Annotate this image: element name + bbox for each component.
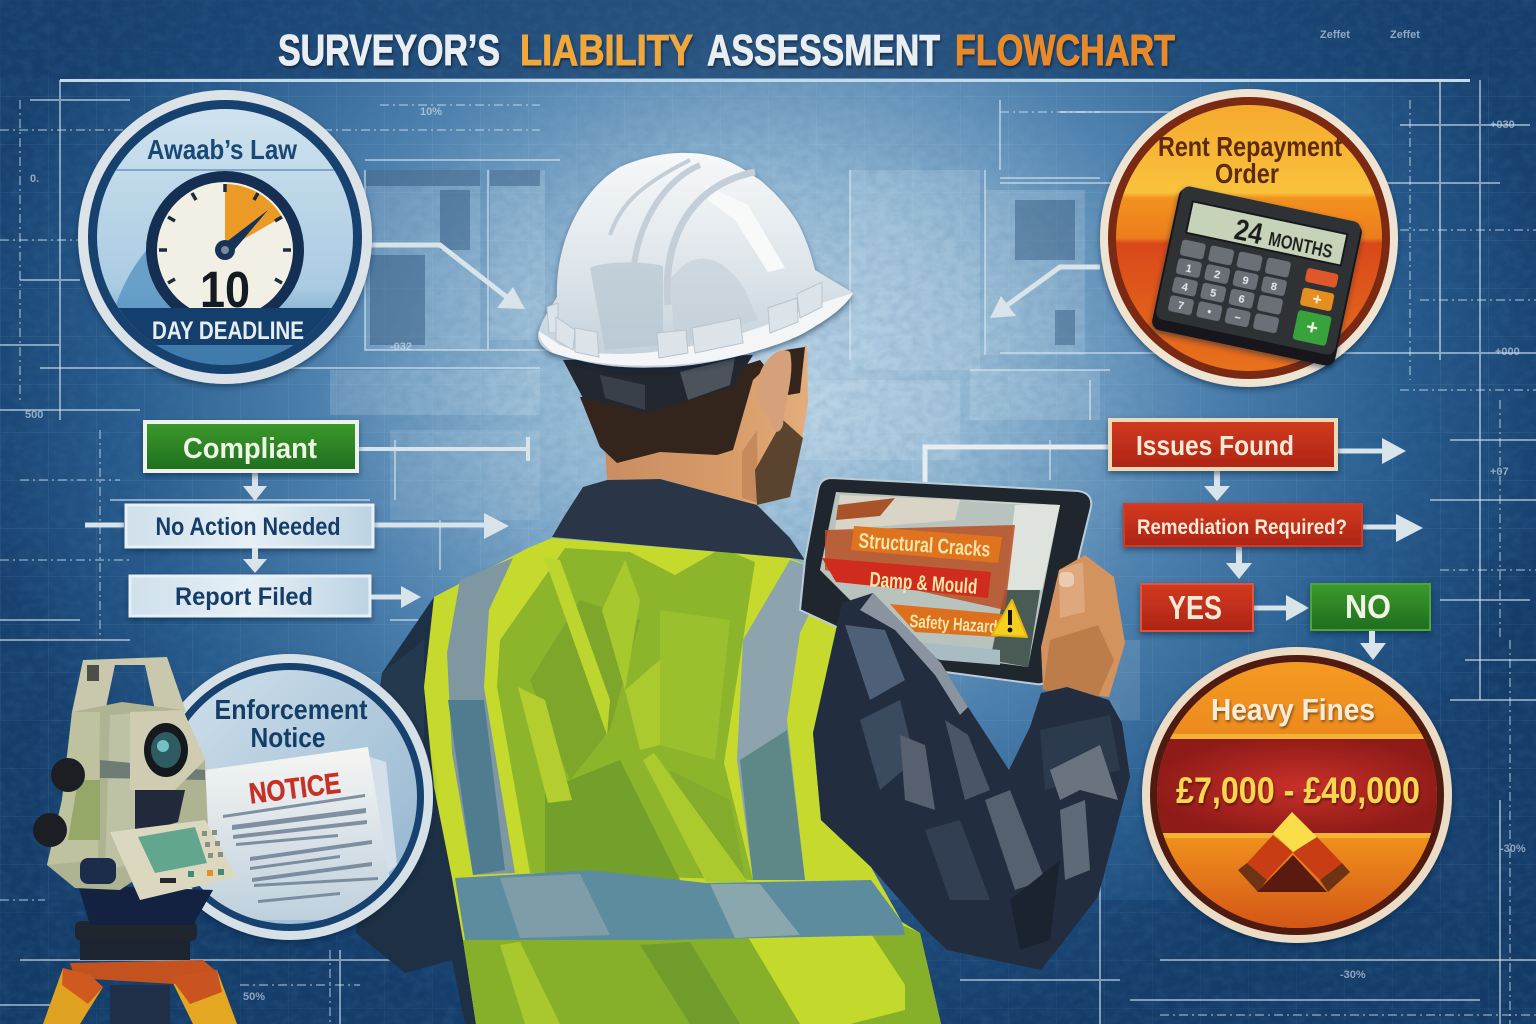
icon: calculator: MONTHS (1266, 229, 1334, 263)
title underline (60, 79, 1470, 82)
icon: notice document: NOTICE (247, 768, 343, 811)
tablet label: Structural Cracks: Structural Cracks (858, 529, 991, 562)
heading: Enforcement Notice (214, 694, 368, 753)
worker seen from behind (356, 153, 1130, 1024)
tablet (800, 478, 1091, 684)
icon: calculator: − (1233, 312, 1242, 325)
flow: compliant branch (85, 422, 528, 616)
heading: Rent Repayment Order (1158, 131, 1342, 189)
badge: Awaab's Law (78, 90, 372, 384)
title: ASSESSMENT (707, 26, 940, 75)
heading: Rent Repayment Order: Rent Repayment (1158, 131, 1342, 162)
tablet label: Safety Hazard (890, 604, 1002, 637)
icon: clock (146, 171, 304, 308)
blueprint background: Zeffet (1390, 29, 1420, 41)
blueprint background: 10% (420, 106, 442, 118)
reflective stripes (447, 558, 905, 940)
arrow: no action to report filed (243, 548, 267, 573)
title (278, 26, 1175, 75)
icon: calculator (1150, 185, 1364, 367)
helmet suspension band (563, 355, 753, 413)
tablet label: Structural Cracks (851, 526, 1002, 563)
icon: calculator: + (1311, 291, 1323, 309)
icon: surveying total station on tripod (33, 657, 237, 1024)
icon: calculator: 6 (1237, 293, 1246, 306)
box: No Action Needed: No Action Needed (156, 513, 340, 541)
connector: compliant to end stop (359, 437, 528, 461)
helmet (538, 153, 853, 368)
box: NO (1311, 584, 1430, 630)
instrument lens (144, 723, 188, 777)
icon: calculator: 9 (1241, 275, 1250, 288)
vest green centre (497, 548, 755, 880)
arrow: report filed to right (371, 586, 421, 608)
instrument body (47, 657, 208, 890)
icon: calculator: 4 (1180, 281, 1190, 294)
box: Remediation Required?: Remediation Required? (1137, 516, 1347, 539)
hair (580, 347, 805, 463)
high-visibility vest (424, 538, 941, 1024)
heading: Enforcement Notice: Enforcement (214, 694, 368, 725)
badge: Enforcement Notice (147, 654, 433, 940)
arrow: issues found to right (1338, 438, 1406, 464)
collar (552, 479, 805, 560)
banner text: Day Deadline: DAY DEADLINE (152, 317, 304, 345)
tablet label: Damp and Mould: Damp & Mould (869, 568, 978, 599)
icon: calculator: 24 (1232, 213, 1266, 251)
arrow: no action to right (85, 513, 509, 539)
heading: Rent Repayment Order: Order (1215, 158, 1279, 189)
arrow: issues found to remediation (1204, 471, 1230, 501)
box: Report Filed (130, 576, 370, 616)
icon: clock: 10 (200, 261, 250, 318)
icon: calculator: 2 (1213, 269, 1221, 282)
heading: Awaab's Law: Awaab’s Law (147, 134, 297, 165)
ear (757, 350, 791, 432)
instrument base (75, 885, 213, 960)
instrument control panel (110, 820, 237, 900)
icon: calculator: • (1206, 306, 1212, 319)
icon: warning triangle (992, 600, 1027, 637)
tripod (43, 960, 237, 1024)
box: No Action Needed (126, 505, 373, 547)
heading: Heavy Fines: Heavy Fines (1211, 692, 1375, 727)
box: YES (1141, 584, 1253, 631)
title: LIABILITY (520, 26, 693, 75)
tablet label: Damp and Mould (822, 558, 991, 599)
box: Report Filed: Report Filed (175, 583, 313, 611)
icon: calculator: 8 (1270, 281, 1278, 294)
box: Remediation Required? (1124, 504, 1362, 546)
instrument knobs (33, 758, 116, 884)
blueprint background: Zeffet (1320, 29, 1350, 41)
blueprint background: 50% (243, 991, 265, 1003)
arrow: yes to no (1254, 595, 1309, 621)
blueprint background: 0. (30, 173, 39, 185)
heading: Enforcement Notice: Notice (250, 722, 326, 753)
icon: calculator: 1 (1184, 263, 1193, 276)
box: Issues Found (1110, 420, 1336, 469)
arrow: remediation to yes (1226, 547, 1252, 579)
helmet rim blocks (547, 282, 822, 358)
hand holding tablet (1041, 555, 1125, 697)
box: Compliant: Compliant (183, 433, 317, 465)
icon: calculator: 5 (1209, 287, 1217, 300)
blueprint background: -032 (390, 341, 412, 353)
tablet label: Safety Hazard: Safety Hazard (909, 611, 998, 637)
arrow: no to heavy fines (1360, 631, 1386, 660)
blueprint background: 500 (25, 409, 43, 421)
blueprint background: -30% (1340, 969, 1366, 981)
right arm and cuff (813, 593, 1130, 970)
vest lower panel (463, 925, 941, 1024)
connector: issues found to tablet (925, 447, 1108, 482)
arrow: remediation to right (1363, 514, 1423, 542)
arrow: compliant to no action (243, 473, 267, 501)
icon: mountain (1238, 812, 1350, 892)
blueprint background: -30% (1500, 843, 1526, 855)
neck and face (605, 345, 808, 505)
title: FLOWCHART (955, 26, 1175, 75)
icon: calculator: 7 (1177, 300, 1185, 313)
box: Issues Found: Issues Found (1136, 430, 1294, 461)
arrow: Rent Repayment Order to worker (990, 267, 1100, 318)
box: Compliant (145, 422, 357, 471)
blueprint background: +000 (1495, 346, 1520, 358)
tablet screen (820, 492, 1060, 667)
icon: calculator: + (1304, 316, 1320, 340)
arrow: Awaab's Law to worker (371, 245, 525, 309)
jacket torso and left arm (356, 597, 500, 1024)
blueprint background: +07 (1490, 466, 1509, 478)
icon: notice document (200, 747, 397, 920)
box: YES: YES (1168, 589, 1222, 626)
title: SURVEYOR’S (278, 26, 500, 75)
flow: issues branch (925, 420, 1430, 660)
badge: Rent Repayment Order (1100, 89, 1398, 387)
fine range: £7,000 - £40,000 (1176, 770, 1420, 811)
badge: Heavy Fines (1142, 647, 1452, 943)
blueprint background: +030 (1490, 119, 1515, 131)
box: NO: NO (1345, 588, 1391, 625)
